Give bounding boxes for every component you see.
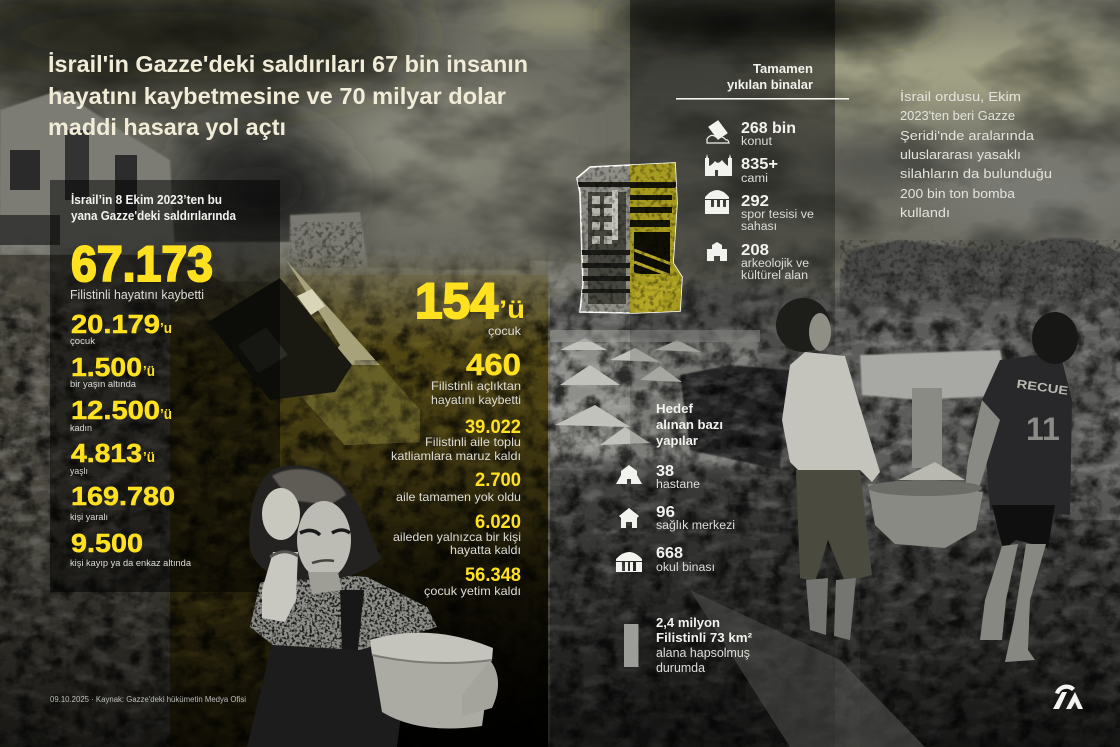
image: bombed tower block cut-out, half yellow xyxy=(577,160,685,315)
stat: 20.179 children xyxy=(70,309,172,347)
stat: 12.500 women: kadın xyxy=(70,423,92,434)
title: hayatını kaybetmesine ve 70 milyar dolar xyxy=(48,83,506,109)
boy on the right xyxy=(964,312,1078,662)
distant skyline xyxy=(170,212,640,290)
stat: 9.500 missing xyxy=(70,528,192,569)
item: archaeological and cultural sites: arkeolojik ve xyxy=(741,258,809,270)
text block: 200 thousand tons of bombs: Şeridi'nde aralarında xyxy=(900,128,1035,143)
stat: 67.173 killed: 67.173 xyxy=(71,236,213,292)
targeted structures section xyxy=(616,402,735,574)
stat: 154 children starved: 154 xyxy=(415,273,498,329)
item: homes: 268 bin xyxy=(741,120,796,137)
metal basin xyxy=(868,462,983,548)
tents and tarps xyxy=(860,350,1010,400)
stat: 39.022 families: katliamlara maruz kaldı xyxy=(391,449,521,463)
tilted container wreck xyxy=(208,260,425,450)
dark overlay panel: right statistics xyxy=(630,0,835,747)
icon: school xyxy=(616,552,642,572)
stat: 39.022 families xyxy=(391,417,521,463)
stat: 2.700 families wiped out: 2.700 xyxy=(475,470,521,491)
heading: yıkılan binalar xyxy=(727,78,813,92)
logo: AA xyxy=(1053,684,1083,709)
intro text: yana Gazze'deki saldırılarında xyxy=(71,209,237,223)
icon: hospital xyxy=(616,465,642,484)
dress xyxy=(247,640,410,747)
destroyed buildings section xyxy=(676,62,849,282)
yellow tinted centre panel xyxy=(170,250,548,747)
stat: 154 children starved xyxy=(415,273,525,338)
stat: 56.348 orphans xyxy=(424,565,521,598)
item: archaeological and cultural sites: 208 xyxy=(741,242,769,259)
stat: 4.813 elderly: yaşlı xyxy=(70,466,88,477)
text block: 200 thousand tons of bombs xyxy=(900,89,1052,220)
stat: 1.500 infants: bir yaşın altında xyxy=(70,379,137,390)
neck xyxy=(308,572,342,594)
text block: 200 thousand tons of bombs: silahların da bulunduğu xyxy=(900,166,1052,181)
hair xyxy=(249,465,382,580)
item: hospitals: hastane xyxy=(656,479,700,491)
centre statistics text xyxy=(391,273,525,598)
stat: 460 died of hunger: 460 xyxy=(466,347,521,382)
stat: 169.780 injured xyxy=(70,481,175,523)
stat: 20.179 children: çocuk xyxy=(70,336,95,347)
photo: two boys carrying a basin xyxy=(776,298,1078,662)
item: health centres: 96 xyxy=(656,504,675,521)
stat: 12.500 women: ’ü xyxy=(160,406,172,423)
stat: 39.022 families: 39.022 xyxy=(465,417,521,438)
stat: 56.348 orphans: çocuk yetim kaldı xyxy=(424,584,521,598)
stat: 6.020 families one survivor xyxy=(393,512,521,557)
item: sports facilities: spor tesisi ve xyxy=(741,209,814,221)
text block: 200 thousand tons of bombs: İsrail ordusu, Ekim xyxy=(900,89,1021,104)
icon: heritage building xyxy=(707,242,727,261)
item: schools xyxy=(616,545,715,574)
stat: 154 children starved: ’ü xyxy=(499,296,525,324)
item: sports facilities: 292 xyxy=(741,193,769,210)
dark overlay panel: left statistics xyxy=(50,180,280,592)
metal pot xyxy=(370,633,498,729)
icon: columned hall xyxy=(705,190,729,214)
stat: 12.500 women: 12.500 xyxy=(71,395,160,425)
text block: 200 thousand tons of bombs: uluslararası yasaklı xyxy=(900,147,1021,162)
stat: 1.500 infants: 1.500 xyxy=(71,352,142,382)
stat: 460 died of hunger xyxy=(431,347,521,407)
heading xyxy=(727,62,813,92)
heading xyxy=(656,402,723,448)
stat: 169.780 injured: kişi yaralı xyxy=(70,512,108,523)
Gaza strip area bar and text: Filistinli 73 km² xyxy=(656,631,752,645)
item: mosques: cami xyxy=(741,173,768,185)
item: health centres xyxy=(619,504,735,532)
title: İsrail'in Gazze'deki saldırıları 67 bin insanın xyxy=(48,51,528,77)
debris plank xyxy=(690,590,925,747)
source line: 09.10.2025 · Kaynak: Gazze'deki hükümetin Medya Ofisi xyxy=(50,695,246,704)
item: hospitals xyxy=(616,463,700,491)
palm tree xyxy=(350,290,406,355)
item: mosques xyxy=(705,154,778,185)
icon: health centre xyxy=(619,508,639,528)
raised arm and hand xyxy=(262,552,298,622)
stat: 1.500 infants xyxy=(70,352,155,390)
heading: alınan bazı xyxy=(656,418,723,432)
Gaza strip area bar and text: durumda xyxy=(656,661,705,675)
item: homes xyxy=(707,120,796,148)
title xyxy=(48,51,528,140)
left statistics text xyxy=(70,192,237,569)
stat: 9.500 missing: 9.500 xyxy=(71,528,143,558)
boy on the right: RECUE xyxy=(1016,377,1069,398)
stat: 2.700 families wiped out xyxy=(396,470,521,504)
stat: 154 children starved: çocuk xyxy=(488,324,522,338)
item: schools: 668 xyxy=(656,545,683,562)
stat: 12.500 women xyxy=(70,395,172,434)
boy on the left xyxy=(776,298,880,640)
item: sports facilities: sahası xyxy=(741,221,777,233)
photo: girl holding a metal pot xyxy=(245,465,498,747)
Gaza strip area bar and text: alana hapsolmuş xyxy=(656,646,750,660)
stat: 56.348 orphans: 56.348 xyxy=(465,565,521,586)
intro text xyxy=(71,192,237,223)
item: health centres: sağlık merkezi xyxy=(656,520,735,532)
left ruined building xyxy=(0,90,175,255)
stat: 6.020 families one survivor: aileden yalnızca bir kişi xyxy=(393,530,521,544)
stat: 460 died of hunger: Filistinli açlıktan xyxy=(431,379,521,393)
stat: 6.020 families one survivor: 6.020 xyxy=(475,512,521,533)
stat: 1.500 infants: ’ü xyxy=(143,363,155,380)
text block: 200 thousand tons of bombs: kullandı xyxy=(900,205,950,220)
heading: yapılar xyxy=(656,434,698,448)
Gaza strip area bar and text: 2,4 milyon xyxy=(656,616,720,630)
stat: 20.179 children: ’u xyxy=(160,320,172,337)
text block: 200 thousand tons of bombs: 2023'ten beri Gazze xyxy=(900,108,1015,123)
stat: 20.179 children: 20.179 xyxy=(71,309,160,339)
intro text: İsrail’in 8 Ekim 2023’ten bu xyxy=(71,192,222,207)
stat: 460 died of hunger: hayatını kaybetti xyxy=(431,393,521,407)
item: archaeological and cultural sites: kültürel alan xyxy=(741,270,808,282)
title: maddi hasara yol açtı xyxy=(48,114,286,140)
item: schools: okul binası xyxy=(656,562,715,574)
stat: 9.500 missing: kişi kayıp ya da enkaz altında xyxy=(70,558,192,569)
stat: 4.813 elderly xyxy=(70,438,155,477)
icon: collapsed building xyxy=(707,121,729,143)
heading: Tamamen xyxy=(753,62,813,76)
icon: mosque xyxy=(705,154,732,176)
text block: 200 thousand tons of bombs: 200 bin ton bomba xyxy=(900,186,1016,201)
boy on the right: 11 xyxy=(1026,411,1060,447)
stat: 4.813 elderly: 4.813 xyxy=(71,438,142,468)
face xyxy=(297,501,351,579)
stat: 67.173 killed: Filistinli hayatını kaybetti xyxy=(70,288,204,302)
item: hospitals: 38 xyxy=(656,463,674,480)
stat: 2.700 families wiped out: aile tamamen yok oldu xyxy=(396,490,521,504)
item: mosques: 835+ xyxy=(741,156,778,173)
stat: 4.813 elderly: ’ü xyxy=(143,449,155,466)
stat: 39.022 families: Filistinli aile toplu xyxy=(425,435,521,449)
item: homes: konut xyxy=(741,136,773,148)
item: sports facilities xyxy=(705,190,814,233)
heading: Hedef xyxy=(656,402,694,416)
Gaza strip area bar and text xyxy=(624,616,752,675)
icon: area bar xyxy=(624,624,638,667)
tents and ground xyxy=(530,285,1120,747)
item: archaeological and cultural sites xyxy=(707,242,809,282)
stat: 6.020 families one survivor: hayatta kaldı xyxy=(450,543,521,557)
stat: 169.780 injured: 169.780 xyxy=(71,481,175,511)
